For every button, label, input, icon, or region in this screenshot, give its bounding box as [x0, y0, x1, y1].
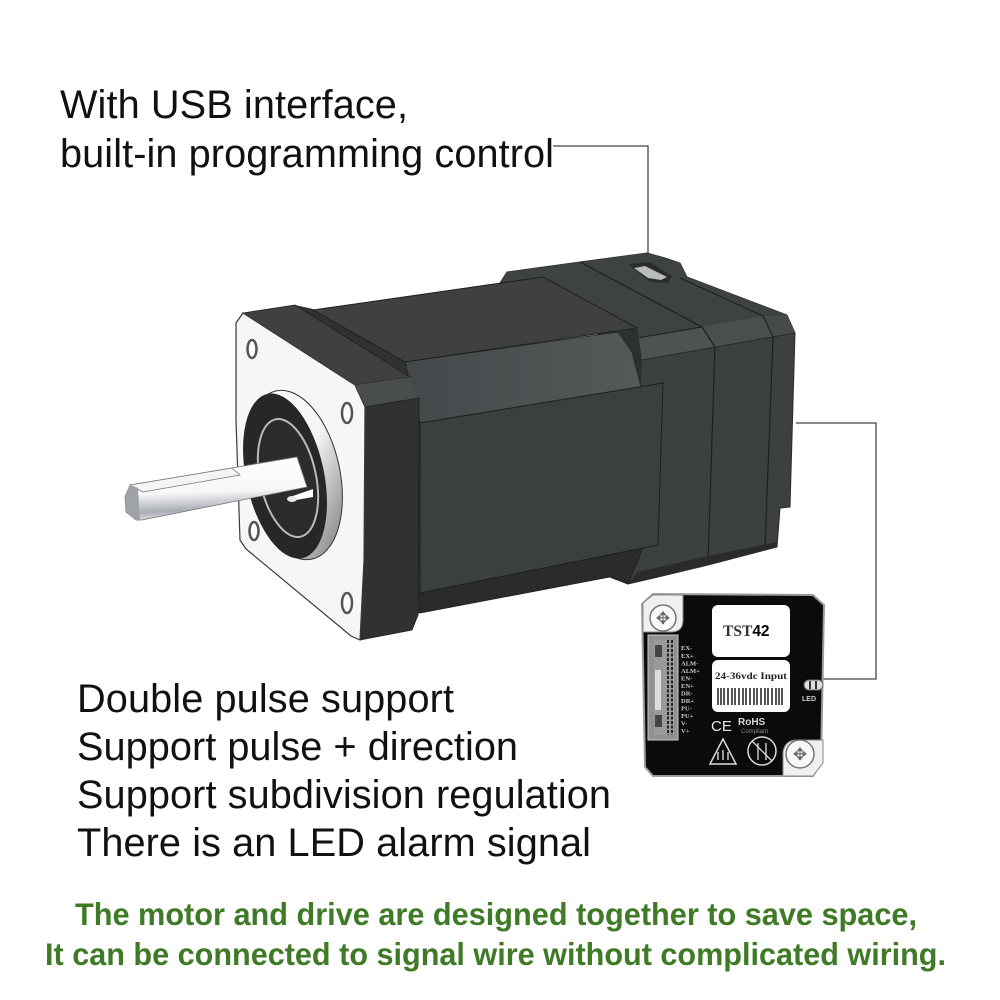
pin labels: PU- [681, 706, 692, 712]
text block: features: There is an LED alarm signal [77, 821, 591, 865]
heading: USB interface callout [60, 83, 554, 176]
footer text: green summary: The motor and drive are designed together to save space, [75, 896, 917, 932]
pin labels: EN+ [681, 683, 694, 690]
label: input and barcode: 24-36vdc Input [715, 672, 788, 682]
arrow: leader line to USB port [553, 146, 648, 266]
icon: USB port [628, 262, 672, 283]
pin labels: ALM+ [681, 668, 700, 675]
bearing ring [229, 381, 357, 569]
pin labels: EN- [681, 676, 692, 682]
compliance marks [711, 717, 768, 735]
pin labels: EX- [681, 645, 692, 652]
text block: features: Double pulse support [77, 677, 454, 721]
heading: USB interface callout: built-in programming control [60, 132, 554, 176]
pin labels: V+ [681, 728, 690, 735]
LED indicator [802, 680, 823, 703]
pin labels: V- [681, 720, 687, 728]
pin labels: DR- [681, 690, 693, 698]
screw corner: bottom right: ✥ [793, 745, 807, 764]
text block: features [77, 677, 611, 865]
icon: prohibition [748, 737, 776, 765]
shaft [125, 457, 313, 520]
compliance marks: CE [711, 718, 732, 735]
screw corner: bottom right [783, 740, 823, 776]
footer text: green summary [45, 896, 946, 972]
pin labels: PU+ [681, 713, 694, 720]
connector [648, 635, 678, 740]
rear drive housing [500, 253, 795, 584]
pin labels: DR+ [681, 698, 694, 705]
icon: hot surface warning [710, 739, 736, 764]
panel: driver board [642, 594, 824, 776]
front flange [236, 305, 419, 640]
pin labels: EX+ [681, 653, 694, 660]
footer text: green summary: It can be connected to signal wire without complicated wiring. [45, 936, 946, 972]
label: input and barcode [712, 660, 790, 712]
mounting holes [248, 340, 352, 613]
pin labels [681, 645, 700, 735]
compliance marks: Compliant [741, 729, 768, 735]
heading: USB interface callout: With USB interface, [60, 83, 408, 127]
text block: features: Support subdivision regulation [77, 773, 611, 817]
illustration: stepper motor [125, 253, 795, 640]
screw corner: top left: ✥ [656, 609, 670, 628]
LED indicator: LED [802, 696, 816, 703]
arrow: leader line to LED [796, 423, 876, 679]
compliance marks: RoHS [738, 717, 766, 728]
label: model [712, 605, 790, 657]
motor body [295, 277, 663, 620]
text block: features: Support pulse + direction [77, 725, 518, 769]
screw corner: top left [643, 595, 683, 632]
label: model: TST42 [723, 623, 770, 640]
pin labels: ALM- [681, 660, 698, 668]
